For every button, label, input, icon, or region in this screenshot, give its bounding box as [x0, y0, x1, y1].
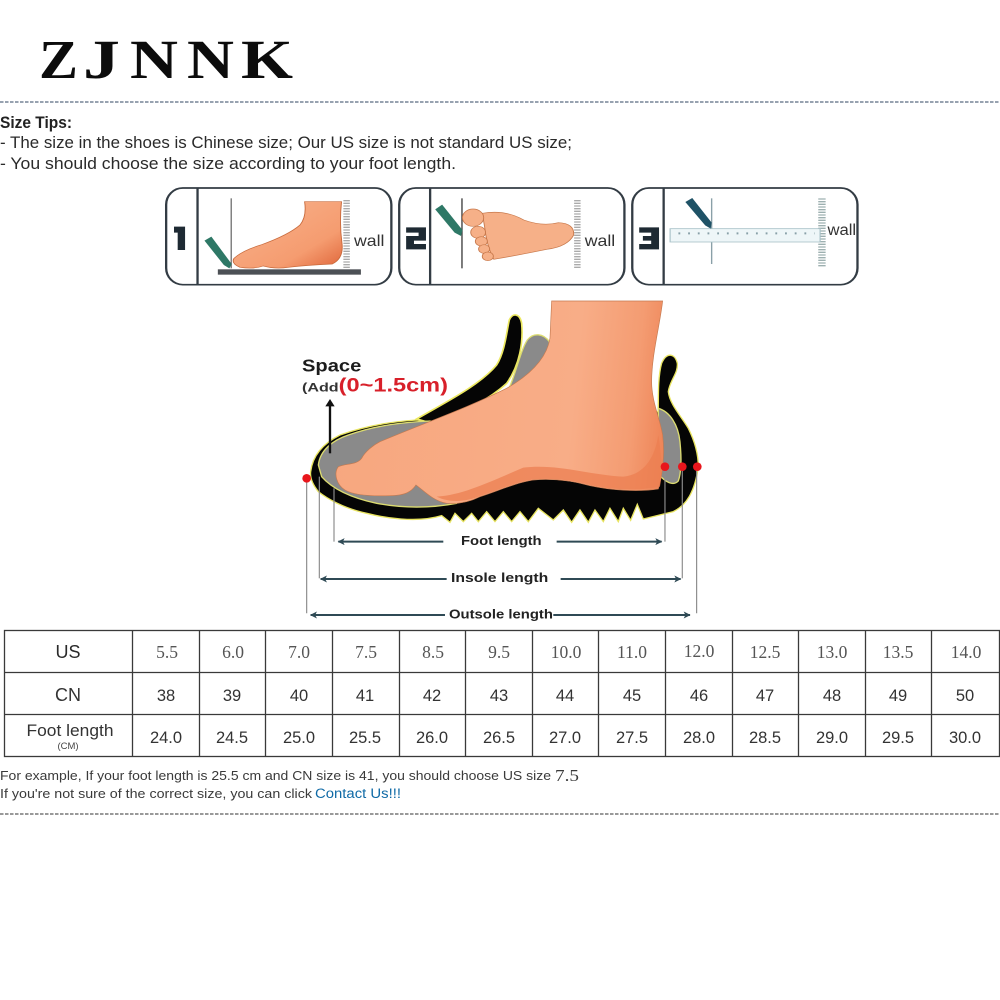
row: foot length [26, 722, 981, 752]
label: add 0~1.5cm [302, 374, 448, 396]
foot top view [462, 209, 574, 261]
row: CN: CN [55, 685, 81, 705]
label: outsole length: Outsole length [449, 607, 553, 622]
row: US: 7.0 [288, 642, 310, 662]
row: foot length: 26.5 [483, 729, 515, 747]
pencil [204, 237, 232, 268]
logo: ZJNNK: N [187, 29, 234, 90]
row: CN: 49 [889, 687, 907, 705]
row: CN: 39 [223, 687, 241, 705]
row: foot length: 27.0 [549, 729, 581, 747]
row: foot length: Foot length [26, 722, 114, 740]
panel: step 1 [166, 188, 391, 285]
row: CN: 44 [556, 687, 574, 705]
red markers [302, 462, 702, 483]
row: US: 12.5 [750, 642, 781, 662]
row: CN: 40 [290, 687, 308, 705]
row: CN: 46 [690, 687, 708, 705]
wall label: wall [584, 233, 615, 250]
row: CN [55, 685, 974, 705]
text block: example note: 7.5 [555, 766, 579, 785]
arrow: foot length [338, 539, 662, 545]
step number 1 [174, 227, 185, 250]
arrow: insole length [321, 576, 681, 582]
row: foot length: 29.5 [882, 729, 914, 747]
logo: ZJNNK: Z [39, 29, 78, 90]
row: US: 12.0 [684, 641, 715, 661]
arrow: outsole length [311, 612, 690, 618]
size table [4, 630, 1000, 757]
row: US: US [55, 642, 81, 662]
row: foot length: 30.0 [949, 729, 981, 747]
row: US: 6.0 [222, 642, 244, 662]
row: CN: 41 [356, 687, 374, 705]
row: US: 7.5 [355, 642, 377, 662]
label: space: Space [302, 355, 362, 375]
step number 3 [639, 227, 659, 249]
logo: ZJNNK: K [241, 29, 293, 90]
row: foot length: 25.5 [349, 729, 381, 747]
text block: size tips: Size Tips: [0, 114, 72, 132]
foot side view [233, 202, 342, 268]
row: US: 5.5 [156, 642, 178, 662]
row: US: 13.5 [883, 642, 914, 662]
row: foot length: 27.5 [616, 729, 648, 747]
text block: size tips [0, 114, 572, 173]
row: US: 13.0 [817, 642, 848, 662]
space arrow [325, 399, 335, 453]
row: US [55, 641, 982, 662]
row: CN: 47 [756, 687, 774, 705]
row: CN: 45 [623, 687, 641, 705]
logo: ZJNNK [39, 29, 293, 90]
step number 2 [406, 227, 426, 249]
text block: size tips: - You should choose the size according to your foot length. [0, 155, 456, 173]
row: foot length: (CM) [57, 741, 79, 752]
foot arch shading [437, 435, 661, 501]
row: US: 11.0 [617, 642, 647, 662]
illustration: foot in shoe with length measurements [302, 301, 702, 622]
row: foot length: 24.5 [216, 729, 248, 747]
shoe sole [311, 355, 698, 522]
wall label: wall [827, 221, 856, 238]
row: foot length: 24.0 [150, 729, 182, 747]
panel: step 2 [399, 188, 624, 285]
text block: example note: Contact Us!!! [315, 786, 401, 801]
row: CN: 43 [490, 687, 508, 705]
logo: ZJNNK: J [83, 29, 120, 90]
pencil [435, 205, 462, 236]
text block: example note: If you're not sure of the correct size, you can click [0, 786, 313, 801]
shoe tongue [417, 315, 522, 423]
label: add 0~1.5cm: (0~1.5cm) [339, 374, 448, 396]
logo: ZJNNK: N [130, 29, 178, 90]
label: insole length: Insole length [451, 570, 548, 585]
row: CN: 48 [823, 687, 841, 705]
row: CN: 42 [423, 687, 441, 705]
foot [336, 301, 664, 504]
row: foot length: 28.5 [749, 729, 781, 747]
wall label: wall [353, 233, 384, 250]
row: foot length: 26.0 [416, 729, 448, 747]
row: US: 10.0 [551, 642, 582, 662]
grey inner upper [508, 335, 549, 390]
label: add 0~1.5cm: (Add [302, 381, 339, 395]
row: US: 9.5 [488, 642, 510, 662]
row: US: 14.0 [951, 642, 982, 662]
pencil [685, 198, 712, 229]
row: US: 8.5 [422, 642, 444, 662]
row: foot length: 28.0 [683, 729, 715, 747]
row: foot length: 29.0 [816, 729, 848, 747]
label: foot length: Foot length [461, 533, 542, 548]
grey heel insole [658, 408, 681, 483]
row: CN: 38 [157, 687, 175, 705]
text block: example note [0, 766, 579, 801]
guide lines [307, 467, 697, 613]
panel: step 3 [632, 188, 857, 285]
row: foot length: 25.0 [283, 729, 315, 747]
ruler [670, 229, 820, 242]
text block: size tips: - The size in the shoes is Chinese size; Our US size is not standard US size; [0, 134, 572, 152]
row: CN: 50 [956, 687, 974, 705]
text block: example note: For example, If your foot length is 25.5 cm and CN size is 41, you should choose US size [0, 768, 551, 783]
grey insole [318, 421, 477, 507]
